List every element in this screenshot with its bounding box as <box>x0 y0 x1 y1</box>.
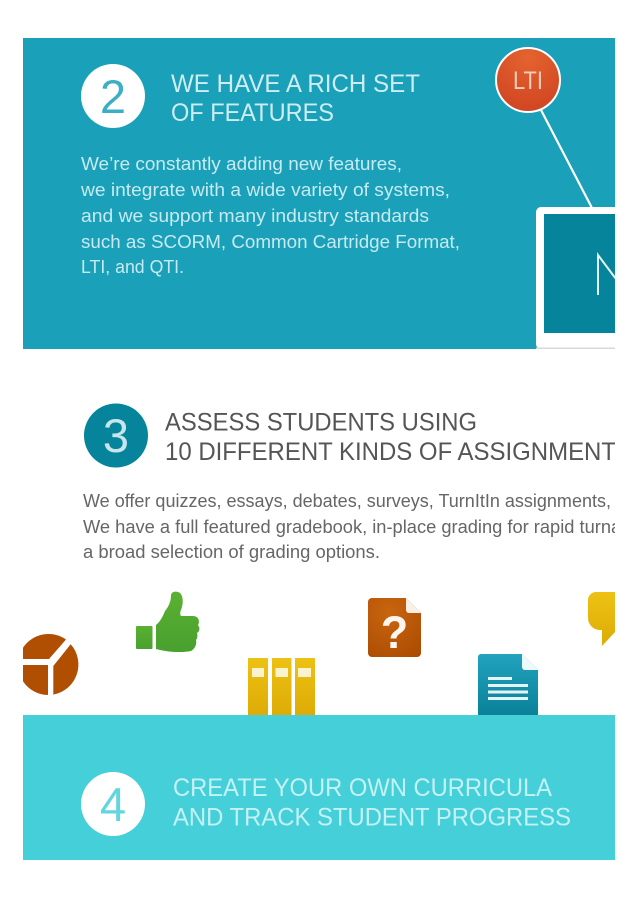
body text: LTI, and QTI. <box>81 256 184 277</box>
body text <box>83 490 638 562</box>
LTI badge: LTI <box>513 67 543 95</box>
heading: 10 DIFFERENT KINDS OF ASSIGNMENTS <box>165 438 632 466</box>
body text: We’re constantly adding new features, <box>81 153 402 174</box>
LTI badge <box>496 48 560 112</box>
panel: assess students <box>23 404 638 715</box>
heading: OF FEATURES <box>171 99 334 127</box>
number badge 3: 3 <box>103 409 129 462</box>
heading: ASSESS STUDENTS USING <box>165 408 477 436</box>
icon: question document: ? <box>381 607 408 658</box>
icon: thumbs up <box>136 592 199 652</box>
icon: question document <box>368 598 421 658</box>
icon: speech bubble <box>588 592 616 646</box>
connector line <box>541 110 592 208</box>
heading: WE HAVE A RICH SET <box>171 70 420 98</box>
heading <box>173 778 570 826</box>
number badge 4 <box>81 772 145 836</box>
monitor <box>536 207 615 349</box>
body text: we integrate with a wide variety of systems, <box>80 179 450 200</box>
panel: create your own curricula <box>23 715 615 860</box>
number badge 2: 2 <box>100 70 126 123</box>
panel background <box>23 715 615 860</box>
heading: AND TRACK STUDENT PROGRESS <box>173 804 571 832</box>
icon: binders <box>248 658 315 715</box>
body text: and we support many industry standards <box>81 205 429 226</box>
body text: a broad selection of grading options. <box>83 541 380 562</box>
icon: text document <box>478 654 538 715</box>
number badge 3 <box>84 404 148 468</box>
heading <box>171 74 420 121</box>
body text: We offer quizzes, essays, debates, surveys, TurnItIn assignments, <box>83 490 611 511</box>
number badge 2 <box>81 64 145 128</box>
heading: CREATE YOUR OWN CURRICULA <box>173 774 552 802</box>
heading <box>165 412 615 460</box>
icon: pie chart <box>23 634 78 695</box>
number badge 4: 4 <box>100 778 126 831</box>
body text <box>80 153 460 277</box>
panel background <box>23 38 615 349</box>
body text: such as SCORM, Common Cartridge Format, <box>81 231 460 252</box>
panel: rich set of features <box>23 38 626 349</box>
